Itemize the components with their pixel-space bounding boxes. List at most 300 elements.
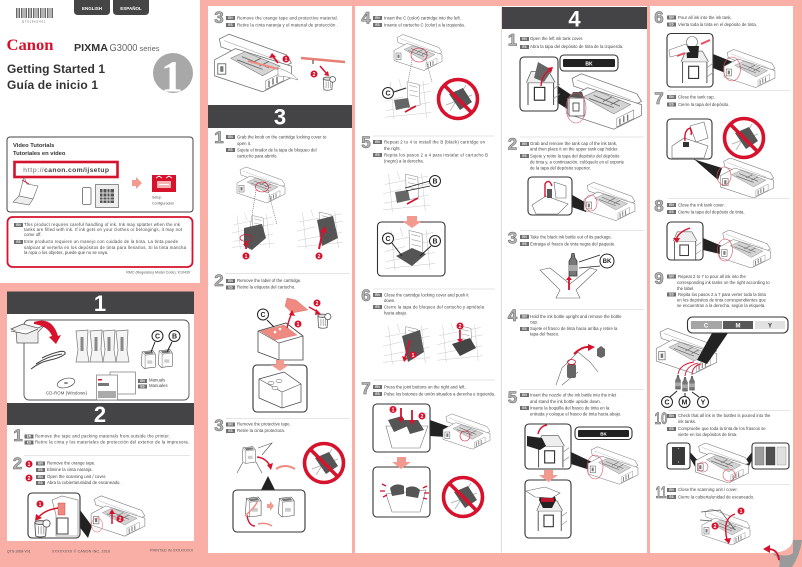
setup label: Setup <box>152 196 161 200</box>
illustration: printer <box>394 34 442 82</box>
language tab: Español <box>113 0 149 15</box>
step 1: locking cover: Sujete el tirador de la tapa de bloqueo del <box>237 148 317 152</box>
step 1: tank cover <box>508 30 623 50</box>
step 10: check: ES <box>669 427 674 431</box>
step 9: repeat: 9 <box>654 269 664 288</box>
illustration: close cover: 1 <box>740 509 743 515</box>
step 8: close cover <box>654 196 745 216</box>
header: 2: 2 <box>94 402 106 427</box>
illustration: printer <box>680 155 774 198</box>
step 3: orange tape: ES <box>228 23 233 27</box>
illustration: close cover <box>383 324 430 364</box>
inset: tilt bottle <box>525 424 571 469</box>
illustration: printer with tape: 1 <box>285 57 288 63</box>
icon: cartridges <box>141 330 180 368</box>
step 3: protective tape: 3 <box>214 416 224 435</box>
setup label: Configuración <box>152 202 174 206</box>
header: 3: 3 <box>274 104 286 130</box>
panel: section 3 continued <box>355 6 502 553</box>
illustration: printer <box>566 182 635 221</box>
illustration: printer open <box>237 167 285 228</box>
illustration: knob: 1 <box>245 254 248 260</box>
step 1: tank cover: Open the left ink tank cover. <box>530 36 583 41</box>
step 2: tank cap: ES <box>522 154 527 158</box>
step 8: close cover: ES <box>669 210 674 214</box>
step 5: install B: (negro) a la derecha. <box>384 158 424 164</box>
product name: PIXMA <box>74 43 108 54</box>
language tab: English <box>74 0 110 15</box>
footer codes: PRINTED IN XXXXXXXX <box>150 548 194 552</box>
illustration: close cover <box>700 508 750 545</box>
step 5: install B: ES <box>375 153 380 157</box>
step 5: insert nozzle <box>508 388 621 416</box>
illustration: cartridge label: 2 <box>316 301 319 307</box>
illustration: tape in bin <box>301 58 345 90</box>
step 5: insert nozzle: 5 <box>508 388 517 407</box>
step 5: insert nozzle: and stand the ink bottle upside down. <box>530 399 601 404</box>
step 1: Retire la cinta y los materiales de protección del exterior de la impresora. <box>35 440 189 444</box>
icon: CD-ROM <box>46 376 88 396</box>
panel: section 4 <box>502 6 647 553</box>
prohibited: touching cartridge <box>304 443 344 483</box>
footer codes: QT6-1068-V01 <box>7 550 31 554</box>
inset: bottle upside down <box>525 470 571 538</box>
arrow: unpack <box>34 321 61 344</box>
step 6: close cover <box>361 286 485 316</box>
inset: pouring <box>667 34 713 87</box>
step 1: EN <box>27 435 32 439</box>
icon: phone <box>82 188 91 204</box>
inset: close cap <box>667 119 712 159</box>
illustration: cartridge label: C <box>260 312 266 319</box>
step 5: install B <box>361 133 488 164</box>
illustration: cartridge label: 1 <box>297 322 300 328</box>
title: Guía de inicio 1 <box>7 78 98 92</box>
step 5: install B: the right. <box>384 146 401 151</box>
step 1: Remove the tape and packing materials from outside the printer. <box>35 434 170 438</box>
manuals label: Manuals <box>149 378 165 382</box>
step 2: tank cap: EN <box>522 142 527 146</box>
warning text: salpicar al verterla en los depósitos de tinta para llenarlos. Si la tinta mancha <box>24 245 187 250</box>
step 4: remove bottle cap: Sujete el frasco de tinta hacia arriba y retire la <box>530 326 618 331</box>
illustration: insert cartridge B <box>383 171 440 212</box>
illustration: close cover: 2 <box>714 524 717 530</box>
step 3: protective tape: EN <box>228 423 233 427</box>
step 5: insert nozzle: ES <box>522 406 527 410</box>
step 3: protective tape: Remove the protective tape. <box>237 422 291 427</box>
illustration: printer <box>703 230 770 268</box>
inset: cartridges installed <box>378 216 445 276</box>
step 4: insert C: Inserte el cartucho C (color) a la izquierda. <box>384 22 465 28</box>
step 3: bottle: ES <box>522 242 527 246</box>
step 6: pour ink <box>654 8 757 27</box>
header: 1: 1 <box>94 291 106 316</box>
panel: warning: ES <box>16 240 21 244</box>
step 6: pour ink: Vierta toda la tinta en el depósito de tinta. <box>678 22 757 27</box>
video heading: Video Tutorials <box>13 143 54 149</box>
product name: G3000 <box>110 43 138 54</box>
inset: tape removed <box>233 490 305 532</box>
step 2: tank cap: Grab and remove the tank cap of the ink tank, <box>530 141 617 146</box>
inset: press buttons <box>373 404 464 452</box>
step 1: locking cover: EN <box>228 135 233 139</box>
footer codes: XXXXXXXX © CANON INC. 2016 <box>52 550 110 554</box>
step 2: remove label: Retire la etiqueta del cartucho. <box>237 284 295 290</box>
illustration: push down: 2 <box>459 324 462 330</box>
step 3: orange tape: Retire la cinta naranja y el material de protección . <box>237 22 338 28</box>
step 2: Remove the orange tape. <box>47 460 96 466</box>
illustration: printer open: 2 <box>119 517 122 523</box>
illustration: push down <box>437 322 483 362</box>
header: 4: 4 <box>568 6 581 32</box>
step 6: close cover: 6 <box>361 286 371 305</box>
step 2: remove label: ES <box>228 286 233 290</box>
icon: ink bottles <box>76 330 129 362</box>
icon: cartridges: B <box>172 334 177 340</box>
step 3: orange tape: 3 <box>214 8 224 27</box>
step 4: insert C: 4 <box>361 8 371 28</box>
inset: open cover <box>520 57 560 111</box>
illustration: bottle in hand <box>556 344 605 385</box>
step 2: EN <box>38 462 43 466</box>
language tab: Español: ESPAÑOL <box>120 5 142 11</box>
step 9: repeat: Repeat 2 to 7 to pour all ink into the <box>678 274 746 279</box>
step 5: install B: 5 <box>361 133 371 152</box>
illustration: lift cover: 2 <box>318 254 321 260</box>
step 6: close cover: down. <box>384 298 395 303</box>
step 11: close unit: Close the scanning unit / cover. <box>678 487 738 492</box>
inset: locked cartridges <box>373 457 430 517</box>
section badge 1: 1 <box>161 52 183 101</box>
icon: cartridges: C <box>155 334 160 340</box>
illustration: printer open <box>91 496 145 536</box>
icon: power cable <box>31 351 65 369</box>
step 10: check: Compruebe que toda la tinta de los frascos se <box>678 426 766 431</box>
step 3: orange tape: Remove the orange tape and protective material. <box>237 16 338 20</box>
step 3: orange tape: EN <box>228 16 233 20</box>
step 4: remove bottle cap: tapa del frasco. <box>530 332 559 336</box>
step 6: pour ink: ES <box>669 23 674 27</box>
illustration: lift cover <box>297 209 343 260</box>
step 1: locking cover: open it. <box>237 141 251 146</box>
step 2: Elimine la cinta naranja. <box>47 467 93 472</box>
panel: video tutorials <box>7 137 193 212</box>
step 4: remove bottle cap: cap. <box>530 320 538 324</box>
model code: RMC (Regulatory Model Code): K10430 <box>126 270 190 274</box>
step 1: tank cover: ES <box>522 45 527 49</box>
step 2: tank cap: de tinta y, a continuación, colóquelo en el soporte <box>530 160 625 164</box>
step 1: 1 <box>13 426 23 445</box>
barcode <box>16 8 52 24</box>
step 11: close unit: ES <box>669 495 674 499</box>
step 6: pour ink: 6 <box>654 8 664 27</box>
inset: cap holder <box>528 177 572 215</box>
illustration: printer <box>713 49 775 88</box>
panel: warning: EN <box>16 223 21 227</box>
footer codes <box>7 548 194 554</box>
icon: box <box>11 324 45 343</box>
step 1: locking cover: 1 <box>214 128 224 147</box>
step 3: protective tape: Retire la cinta protectora. <box>237 428 285 433</box>
step 7: joint buttons: Press the joint buttons on the right and left. <box>384 384 466 390</box>
video heading: Tutoriales en video <box>13 151 66 157</box>
URL box: http://canon.com/ijsetup <box>23 167 109 174</box>
illustration: insert cartridge C: C <box>385 90 391 98</box>
step 1 <box>13 426 189 445</box>
panel: warning <box>8 217 192 267</box>
step 2: EN <box>38 475 43 479</box>
inset: close cover <box>667 222 703 260</box>
step 9: repeat: en los depósitos de tinta correspondientes que <box>677 298 766 302</box>
step 2: tank cap: and then place it on the upper tank cap holder. <box>530 146 618 152</box>
header: 3 <box>208 104 352 130</box>
step 2: Abra la cubierta/unidad de escaneado. <box>47 480 121 485</box>
prohibited: loose cartridges <box>443 477 483 517</box>
step 4: insert C: Insert the C (color) cartridge into the left. <box>384 16 461 20</box>
inset: press buttons: 2 <box>421 414 424 420</box>
illustration: ink bottles CMY: M <box>682 400 688 406</box>
illustration: printer <box>443 414 490 449</box>
step 2: tank cap: Sujete y retire la tapa del depósito del depósito <box>530 154 620 158</box>
inset: cartridge without label <box>253 360 307 412</box>
prohibited: open cap <box>724 118 764 158</box>
step 2: remove label: Remove the label of the cartridge. <box>237 278 302 283</box>
inset: black tank <box>667 443 690 469</box>
illustration: printer tanks <box>690 443 752 483</box>
title: Getting Started 1 <box>7 62 105 76</box>
warning text: come off. <box>24 232 42 237</box>
illustration: remove tape <box>237 443 295 490</box>
step 9: repeat: Repita los pasos 2 a 7 para verter toda la tinta <box>678 292 767 297</box>
inset: press buttons: 1 <box>392 407 395 413</box>
step 2: Open the scanning unit / cover. <box>47 474 106 479</box>
product name: series <box>140 44 160 53</box>
icon: CD-ROM: CD-ROM (Windows) <box>46 390 88 396</box>
step 5: insert nozzle: entrada y coloque el frasco de tinta hacia abajo. <box>530 412 621 416</box>
illustration: printer <box>550 74 641 129</box>
step 6: pour ink: Pour all ink into the ink tank. <box>678 15 732 20</box>
manuals label <box>138 378 168 389</box>
step 10: check: EN <box>669 414 674 418</box>
step 6: close cover: Close the cartridge locking cover and push it <box>384 292 469 298</box>
illustration: cartridge label <box>258 298 331 360</box>
step 10: check: vierte en los depósitos de tinta. <box>678 432 737 437</box>
step 6: close cover: ES <box>375 305 380 309</box>
icon: laptop <box>13 177 38 205</box>
step 10: check: ink tanks. <box>678 419 696 424</box>
panel: section 4 continued <box>650 6 793 553</box>
illustration: ink bottles CMY <box>662 362 708 408</box>
arrow <box>132 177 142 189</box>
step 8: close cover: EN <box>669 203 674 207</box>
illustration: ink bottle and package <box>540 253 614 298</box>
step 11: close unit <box>656 483 754 502</box>
step 2: 2 <box>13 454 22 473</box>
step 10: check: 10 <box>654 409 668 428</box>
label: CMY <box>688 317 788 333</box>
step 2: ES <box>38 481 43 485</box>
step 3: bottle: EN <box>522 235 527 239</box>
panel: section 1 and 2 <box>7 291 194 541</box>
step 2: tank cap: de la tapa del depósito superior. <box>530 166 591 170</box>
step 2 <box>13 454 121 485</box>
illustration: orange tape <box>28 493 92 538</box>
step 4: remove bottle cap: 4 <box>508 306 518 325</box>
step 11: close unit: 11 <box>656 483 666 502</box>
step 7: joint buttons: Pulse los botones de unión situados a derecha e izquierda. <box>384 392 495 396</box>
step 2: remove label: 2 <box>214 271 224 290</box>
step 9: repeat: corresponding ink tanks on the right according to <box>677 280 770 285</box>
step 7: close cap <box>654 89 729 108</box>
step 4: remove bottle cap: EN <box>522 315 527 319</box>
illustration: printer CMY <box>656 328 728 374</box>
step 1: locking cover: Grab the knob on the cartridge locking cover to <box>237 134 327 140</box>
step 5: install B: Repita los pasos 2 a 4 para instalar el cartucho B <box>384 152 488 158</box>
step 2: remove label: EN <box>228 279 233 283</box>
header: 4 <box>502 6 647 32</box>
step 1: locking cover: cartucho para abrirlo. <box>237 154 278 158</box>
step 6: close cover: EN <box>375 293 380 297</box>
step 2: 2 <box>28 476 31 482</box>
step 7: joint buttons: EN <box>375 385 380 389</box>
step 4: remove bottle cap: ES <box>522 327 527 331</box>
step 4: insert C: EN <box>375 16 380 20</box>
step 5: insert nozzle: EN <box>522 393 527 397</box>
warning text: la ropa o los objetos, puede que no se vaya. <box>24 250 108 255</box>
illustration: tape in bin: 2 <box>313 72 316 78</box>
manuals label: EN <box>140 379 145 383</box>
manuals label: ES <box>140 385 145 389</box>
step 4: insert C: ES <box>375 23 380 27</box>
step 6: pour ink: EN <box>669 16 674 20</box>
warning text: This product requires careful handling of ink. Ink may splatter when the ink <box>24 222 181 227</box>
icon: setup <box>152 175 176 192</box>
inset: cartridges installed: B <box>432 238 438 246</box>
video heading <box>13 143 66 157</box>
step 1: ES <box>27 441 31 445</box>
illustration: insert cartridge C <box>382 79 431 119</box>
illustration: ink bottles CMY: Y <box>701 400 706 406</box>
icon: manuals <box>96 372 136 400</box>
step 9: repeat: ES <box>669 293 674 297</box>
step 3: bottle: Extraiga el frasco de tinta negra del paquete. <box>530 242 616 246</box>
label: BK <box>575 427 632 440</box>
step 1: tank cover: 1 <box>508 30 517 50</box>
step 9: repeat <box>654 269 770 308</box>
header: 1 <box>7 291 194 316</box>
Canon logo: Canon <box>6 37 54 54</box>
step 10: check: Check that all ink in the bottles is poured into the <box>678 413 771 418</box>
step 5: install B: Repeat 2 to 4 to install the B (black) cartridge on <box>384 140 486 144</box>
inset: cartridges installed: C <box>385 236 391 243</box>
step 11: close unit: Cierre la cubierta/unidad de escaneado. <box>678 494 754 500</box>
language tab: English: ENGLISH <box>82 6 102 11</box>
prohibited: forcing cartridge <box>438 79 478 119</box>
step 6: close cover: hacia abajo. <box>384 310 407 316</box>
page curl <box>763 540 802 567</box>
manuals label: Manuales <box>149 383 168 388</box>
title <box>7 62 105 92</box>
illustration: printer <box>571 447 638 484</box>
step 3: bottle <box>508 228 616 248</box>
step 8: close cover: Close the ink tank cover. <box>678 202 725 208</box>
step 3: bottle: Take the black ink bottle out of its package. <box>530 234 612 240</box>
panel: cover <box>0 0 200 283</box>
step 1: locking cover: ES <box>228 148 233 152</box>
label: CMY: M <box>736 323 740 329</box>
icon: QR code <box>96 184 118 208</box>
step 9: repeat: se encuentran a la derecha, según la etiqueta. <box>677 303 765 308</box>
illustration: ink bottle and package: BK <box>603 259 612 265</box>
label: CMY: C <box>704 323 709 329</box>
step 1: tank cover: EN <box>522 37 527 41</box>
step 5: install B: EN <box>375 140 380 144</box>
header: 2 <box>7 402 194 427</box>
frame: box contents <box>24 320 189 400</box>
step 10: check <box>654 409 771 437</box>
step 7: joint buttons: 7 <box>361 379 371 398</box>
step 7: close cap: Cierre la tapa del depósito. <box>678 102 729 107</box>
product name <box>74 43 160 54</box>
step 1: tank cover: Abra la tapa del depósito de tinta de la izquierda. <box>530 44 623 49</box>
step 5: insert nozzle: Insert the nozzle of the ink bottle into the inlet <box>530 392 617 398</box>
step 11: close unit: EN <box>669 488 674 492</box>
step 7: close cap: EN <box>669 95 674 99</box>
step 5: insert nozzle: Inserte la boquilla del frasco de tinta en la <box>530 406 610 410</box>
step 7: joint buttons <box>361 379 495 398</box>
step 4: remove bottle cap <box>508 306 622 336</box>
step 2: ES <box>38 468 43 472</box>
section badge 1 <box>153 52 193 101</box>
warning text: tanks are filled with ink. If ink gets on your clothes or belongings, it may not <box>24 227 183 232</box>
illustration: close cover: 1 <box>412 353 415 359</box>
label: BK: BK <box>600 432 607 436</box>
step 3: protective tape: ES <box>228 429 233 433</box>
label: CMY: Y <box>768 323 772 329</box>
label: BK <box>560 55 618 71</box>
step 9: repeat: EN <box>669 275 674 279</box>
step 6: close cover: Cierre la tapa de bloqueo del cartucho y apriétela <box>384 304 485 310</box>
step 4: insert C <box>361 8 465 28</box>
URL box <box>14 162 118 177</box>
step 1: locking cover <box>214 128 327 158</box>
warning text: Este producto requiere un manejo con cuidado de la tinta. La tinta puede <box>24 239 179 244</box>
step 3: protective tape <box>214 416 291 435</box>
illustration: insert cartridge B: B <box>432 178 438 186</box>
step 2: tank cap <box>508 134 625 170</box>
step 7: close cap: Close the tank cap. <box>678 94 715 100</box>
illustration: ink bottles CMY: C <box>664 400 670 406</box>
step 2: tank cap: 2 <box>508 134 517 154</box>
barcode: QT5186SV01 <box>22 20 46 24</box>
step 8: close cover: 8 <box>654 196 664 216</box>
step 7: joint buttons: ES <box>375 392 380 396</box>
step 3: bottle: 3 <box>508 228 517 248</box>
warning text <box>24 222 187 255</box>
step 3: orange tape <box>214 8 338 28</box>
label: BK: BK <box>585 62 593 68</box>
illustration: orange tape: 1 <box>39 502 42 508</box>
step 9: repeat: the label. <box>677 286 694 291</box>
illustration: printer with tape <box>215 34 298 92</box>
step 7: close cap: ES <box>669 103 674 107</box>
step 7: close cap: 7 <box>654 89 664 108</box>
step 8: close cover: Cierre la tapa del depósito de tinta. <box>678 210 745 214</box>
step 4: remove bottle cap: Hold the ink bottle upright and remove the bottle <box>530 314 622 319</box>
illustration: knob <box>232 213 274 260</box>
panel: section 2 continued and section 3 <box>208 6 352 553</box>
step 2: 1 <box>28 462 31 468</box>
